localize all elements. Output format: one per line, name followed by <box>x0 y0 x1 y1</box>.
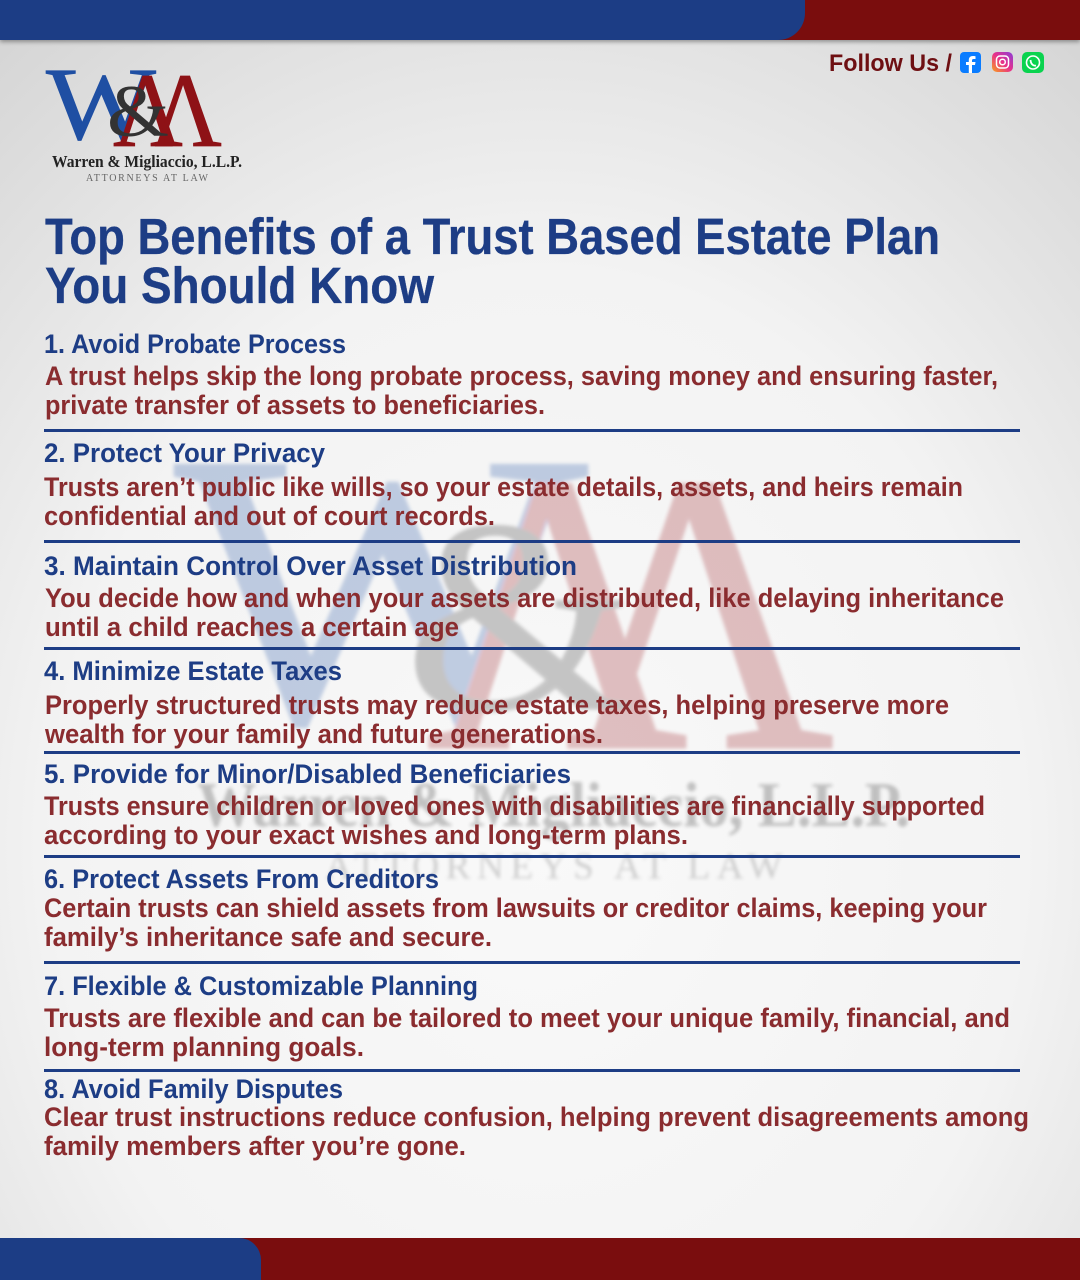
watermark logo: Λ <box>565 393 835 833</box>
description: family’s inheritance safe and secure. <box>44 922 492 952</box>
description: private transfer of assets to beneficiaries. <box>45 390 545 420</box>
logo: Warren & Migliaccio, L.L.P. <box>52 152 242 171</box>
benefit 4 <box>44 656 949 749</box>
heading: 3. Maintain Control Over Asset Distribution <box>44 551 577 581</box>
description: long-term planning goals. <box>44 1032 364 1062</box>
description: Trusts ensure children or loved ones with disabilities are financially supported <box>44 791 985 821</box>
description <box>44 893 987 952</box>
benefit 3 <box>44 551 1004 642</box>
watermark logo <box>175 374 910 887</box>
icon: instagram <box>992 52 1013 72</box>
logo <box>46 47 242 184</box>
bottom footer bar <box>0 1238 1080 1280</box>
heading: 6. Protect Assets From Creditors <box>44 864 439 894</box>
description: Trusts aren’t public like wills, so your estate details, assets, and heirs remain <box>44 472 963 502</box>
description <box>45 361 998 420</box>
heading: 2. Protect Your Privacy <box>44 438 325 468</box>
description <box>44 791 985 850</box>
description: according to your exact wishes and long-term plans. <box>44 820 688 850</box>
logo: ATTORNEYS AT LAW <box>86 173 209 184</box>
description <box>44 1102 1029 1161</box>
heading: 8. Avoid Family Disputes <box>44 1074 343 1104</box>
icon: facebook <box>960 52 981 73</box>
title <box>45 208 940 314</box>
title: You Should Know <box>45 257 434 314</box>
logo: & <box>107 71 169 153</box>
description: confidential and out of court records. <box>44 501 495 531</box>
top header bar <box>0 0 1080 40</box>
benefit 5 <box>44 759 985 850</box>
description: Certain trusts can shield assets from lawsuits or creditor claims, keeping your <box>44 893 987 923</box>
description: family members after you’re gone. <box>44 1131 466 1161</box>
logo: Λ <box>150 52 222 169</box>
description: You decide how and when your assets are distributed, like delaying inheritance <box>45 583 1004 613</box>
description <box>44 690 949 749</box>
logo: W <box>46 47 156 162</box>
watermark logo: Warren & Migliaccio, L.L.P. <box>198 769 910 840</box>
watermark logo: Λ <box>426 393 689 833</box>
description: until a child reaches a certain age <box>45 612 459 642</box>
heading: 1. Avoid Probate Process <box>44 329 346 359</box>
description: Clear trust instructions reduce confusion, helping prevent disagreements among <box>44 1102 1029 1132</box>
benefit 6 <box>44 864 987 952</box>
follow us label: Follow Us / <box>829 50 952 77</box>
benefit 7 <box>44 971 1010 1062</box>
description: Trusts are flexible and can be tailored to meet your unique family, financial, and <box>44 1003 1010 1033</box>
social links <box>829 50 1044 77</box>
logo: Λ <box>113 52 183 169</box>
benefit 2 <box>44 438 963 531</box>
description: A trust helps skip the long probate process, saving money and ensuring faster, <box>45 361 998 391</box>
description: wealth for your family and future generations. <box>44 719 603 749</box>
description: Properly structured trusts may reduce estate taxes, helping preserve more <box>45 690 949 720</box>
benefit 8 <box>44 1074 1029 1161</box>
watermark logo: W <box>175 374 592 806</box>
heading: 4. Minimize Estate Taxes <box>44 656 342 686</box>
watermark logo: ATTORNEYS AT LAW <box>325 846 783 887</box>
description <box>44 472 963 531</box>
watermark logo: & <box>404 464 636 771</box>
heading: 7. Flexible & Customizable Planning <box>44 971 478 1001</box>
description <box>45 583 1004 642</box>
icon: whatsapp <box>1022 52 1044 73</box>
description <box>44 1003 1010 1062</box>
benefit 1 <box>44 329 998 420</box>
title: Top Benefits of a Trust Based Estate Plan <box>45 208 940 265</box>
heading: 5. Provide for Minor/Disabled Beneficiaries <box>44 759 571 789</box>
